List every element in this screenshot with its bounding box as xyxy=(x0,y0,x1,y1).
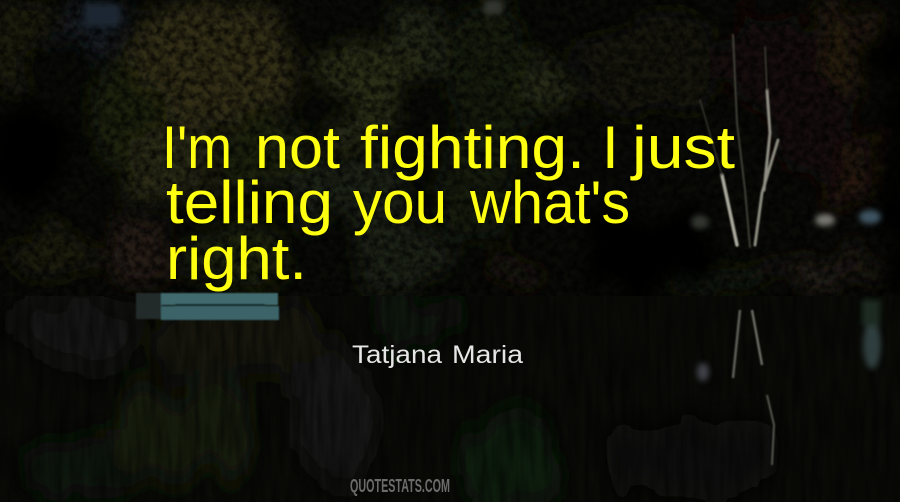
line 1: I'm xyxy=(162,114,232,181)
line 2 xyxy=(166,169,630,236)
line 3: right. xyxy=(166,225,307,292)
line 2: telling xyxy=(166,169,333,236)
line 1: not xyxy=(255,114,340,181)
line 1: I xyxy=(602,114,619,181)
birch trees xyxy=(700,35,778,247)
distant light patches xyxy=(85,0,881,229)
watermark: QUOTESTATS.COM xyxy=(350,476,450,496)
line 1: just xyxy=(630,114,735,181)
line 1: fighting. xyxy=(360,114,585,181)
line 2: what's xyxy=(469,169,630,236)
quote text xyxy=(162,114,735,292)
forest bank xyxy=(0,0,900,296)
author name: Maria xyxy=(452,341,523,369)
tree reflections xyxy=(733,310,774,465)
reflection patches xyxy=(697,300,881,381)
line 2: you xyxy=(353,169,447,236)
line 1 xyxy=(162,114,735,181)
author name xyxy=(352,341,523,369)
dark left edge and dark bush xyxy=(0,44,900,292)
water reflections xyxy=(32,296,684,502)
boat xyxy=(136,293,279,320)
foliage speckle xyxy=(0,0,900,296)
author name: Tatjana xyxy=(352,341,442,369)
